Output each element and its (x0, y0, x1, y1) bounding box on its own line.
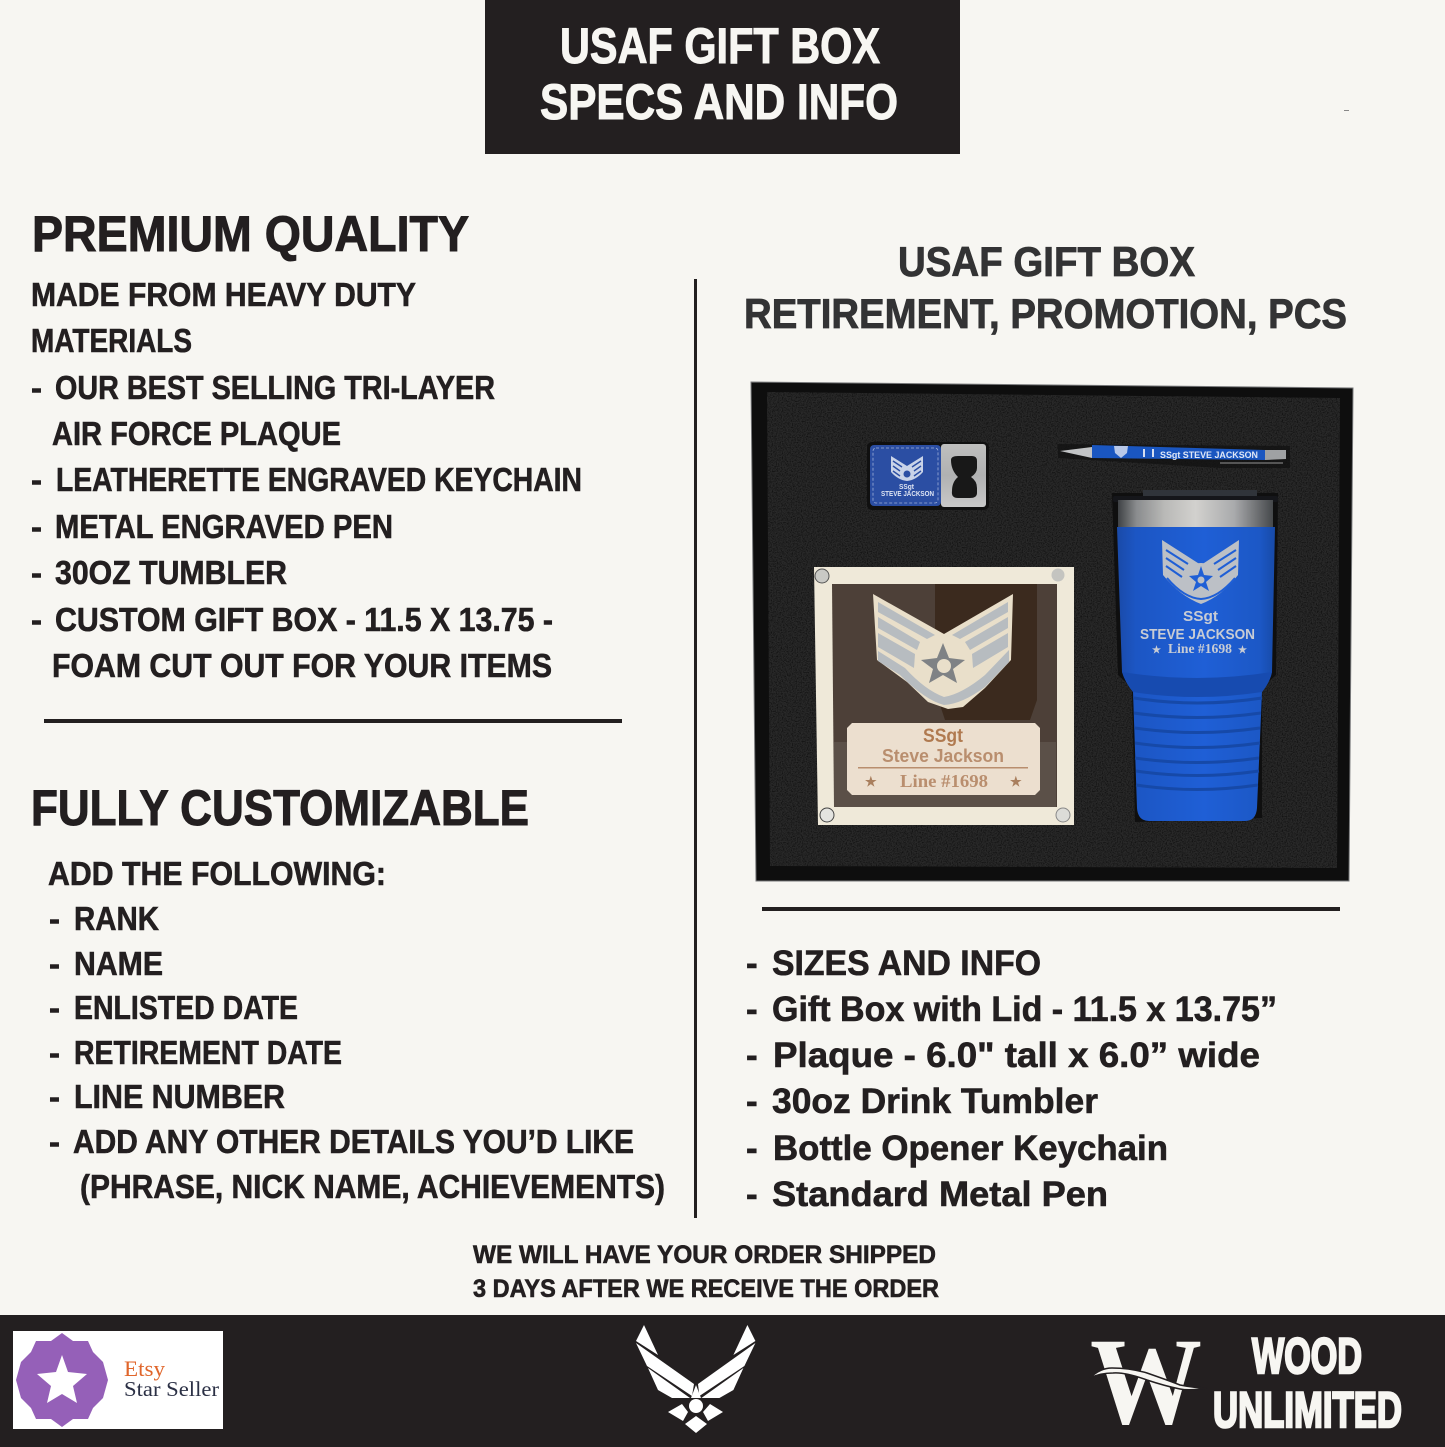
keychain: STEVE JACKSON (881, 491, 934, 498)
text block: materials list: - (31, 554, 42, 591)
text block: materials list: AIR FORCE PLAQUE (52, 415, 341, 452)
logo: Wood Unlimited (1090, 1313, 1402, 1447)
text block: customization options: - (49, 1034, 60, 1071)
tumbler (1112, 490, 1278, 822)
text block: sizes and info: Bottle Opener Keychain (773, 1129, 1168, 1168)
badge: Etsy star seller: Etsy (124, 1356, 165, 1381)
tumbler engraving: ★ (1238, 645, 1247, 656)
text block: customization options: - (49, 900, 60, 937)
text block: sizes and info: Standard Metal Pen (772, 1175, 1108, 1214)
logo: Wood Unlimited: WOOD (1252, 1328, 1362, 1384)
text block: sizes and info: - (746, 1129, 758, 1168)
text block: materials list: 30OZ TUMBLER (55, 554, 287, 591)
text block: customization options: ADD THE FOLLOWING: (48, 855, 386, 892)
text block: materials list: - (31, 461, 42, 498)
text block: materials list: FOAM CUT OUT FOR YOUR ITEMS (52, 647, 552, 684)
text block: sizes and info: - (746, 990, 758, 1029)
panel: premium quality (31, 206, 582, 684)
keychain: SSgt (899, 484, 915, 491)
text block: sizes and info (746, 944, 1277, 1214)
tumbler engraving: Line #1698 (1168, 642, 1232, 657)
text block: sizes and info: Plaque - 6.0" tall x 6.0” wide (773, 1036, 1260, 1075)
heading: fully customizable: FULLY CUSTOMIZABLE (31, 780, 529, 836)
text block: sizes and info: - (746, 944, 758, 983)
heading: premium quality: PREMIUM QUALITY (32, 206, 469, 262)
text block: materials list: CUSTOM GIFT BOX - 11.5 X 13.75 - (55, 601, 553, 638)
pen: SSgt STEVE JACKSON (1160, 450, 1258, 461)
icon: purple star badge (16, 1333, 108, 1427)
heading: gift box occasions (744, 238, 1347, 337)
panel: fully customizable (31, 780, 665, 1205)
plaque nameplate: ★ (1010, 774, 1022, 789)
text block: sizes and info: 30oz Drink Tumbler (772, 1082, 1098, 1121)
text block: customization options: ENLISTED DATE (74, 989, 298, 1026)
text block: materials list: - (31, 508, 42, 545)
plaque nameplate: Steve Jackson (882, 746, 1004, 766)
shipping note: 3 DAYS AFTER WE RECEIVE THE ORDER (473, 1275, 939, 1303)
footer band (0, 1313, 1445, 1447)
tumbler engraving: ★ (1152, 645, 1161, 656)
plaque nameplate: SSgt (923, 726, 964, 747)
gift box base (751, 382, 1353, 881)
text block: customization options: ADD ANY OTHER DETAILS YOU’D LIKE (73, 1123, 634, 1160)
text block: customization options: RANK (74, 900, 159, 937)
tumbler engraving: STEVE JACKSON (1140, 626, 1255, 643)
text block: materials list: OUR BEST SELLING TRI-LAYER (55, 369, 495, 406)
title banner: USAF GIFT BOX (560, 18, 880, 74)
title banner (485, 0, 960, 154)
icon: air force emblem (636, 1325, 755, 1433)
plaque chevron (873, 594, 1013, 709)
plaque nameplate: ★ (865, 774, 877, 789)
text block: sizes and info: Gift Box with Lid - 11.5 x 13.75” (772, 990, 1277, 1029)
pen (1058, 444, 1290, 468)
text block: materials list: - (31, 369, 42, 406)
text block: sizes and info: - (746, 1082, 758, 1121)
product photo: open gift box (751, 382, 1353, 881)
text block: sizes and info: - (746, 1036, 758, 1075)
text block: customization options: - (49, 1123, 60, 1160)
shipping note (473, 1241, 939, 1303)
text block: materials list: MATERIALS (31, 322, 192, 359)
badge: Etsy star seller (13, 1331, 223, 1429)
text block: customization options: - (49, 1078, 60, 1115)
text block: materials list: MADE FROM HEAVY DUTY (31, 276, 416, 313)
text block: materials list: LEATHERETTE ENGRAVED KEYCHAIN (56, 461, 582, 498)
title banner: SPECS AND INFO (540, 74, 898, 130)
tumbler engraving (1140, 608, 1255, 657)
text block: materials list (31, 276, 582, 684)
shipping note: WE WILL HAVE YOUR ORDER SHIPPED (473, 1241, 936, 1269)
text block: customization options: LINE NUMBER (74, 1078, 285, 1115)
tumbler chevron (1162, 540, 1239, 604)
plaque (814, 567, 1074, 825)
tumbler ribs (1134, 698, 1262, 790)
text block: customization options: NAME (74, 945, 163, 982)
badge: Etsy star seller: Star Seller (124, 1377, 219, 1401)
text block: materials list: METAL ENGRAVED PEN (55, 508, 393, 545)
text block: materials list: - (31, 601, 42, 638)
text block: customization options: RETIREMENT DATE (74, 1034, 342, 1071)
plaque nameplate: Line #1698 (900, 771, 988, 791)
text block: customization options: - (49, 989, 60, 1026)
tumbler engraving: SSgt (1183, 608, 1218, 625)
heading: gift box occasions: RETIREMENT, PROMOTION, PCS (744, 290, 1347, 337)
plaque nameplate (847, 723, 1040, 795)
keychain (867, 442, 989, 510)
text block: sizes and info: SIZES AND INFO (772, 944, 1041, 983)
text block: sizes and info: - (746, 1175, 758, 1214)
text block: customization options: - (49, 945, 60, 982)
icon: W monogram: W (1090, 1313, 1202, 1447)
foam insert (767, 392, 1340, 868)
text block: customization options (48, 855, 665, 1205)
text block: customization options: (PHRASE, NICK NAME, ACHIEVEMENTS) (80, 1168, 665, 1205)
heading: gift box occasions: USAF GIFT BOX (898, 238, 1195, 285)
